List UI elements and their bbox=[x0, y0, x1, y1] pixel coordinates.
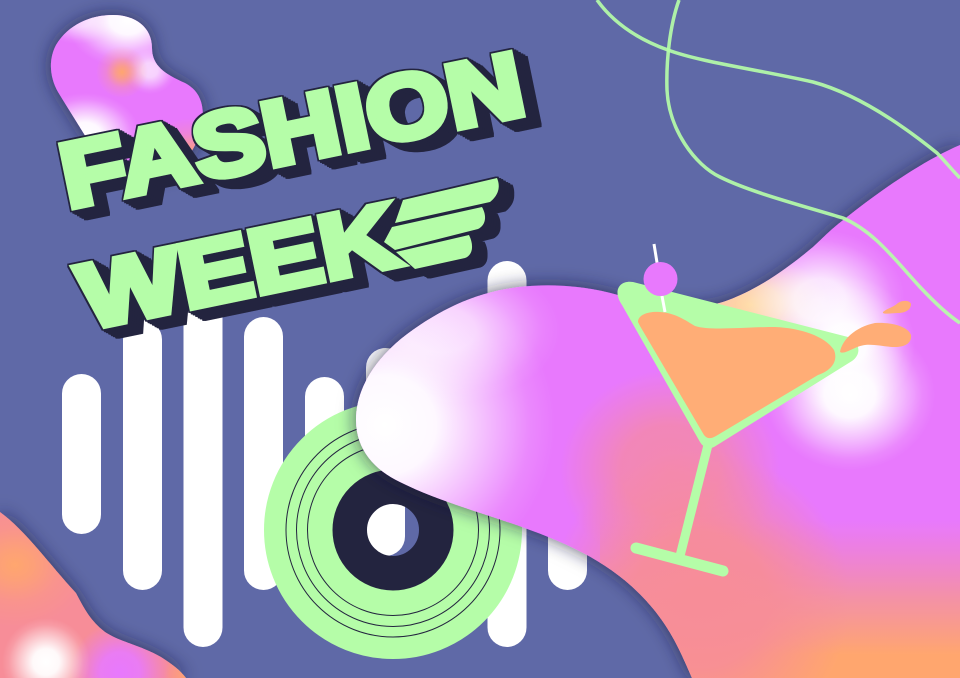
cocktail glass bbox=[618, 244, 911, 571]
splash droplet bbox=[883, 301, 911, 314]
thin curve one bbox=[597, 0, 960, 178]
title: FASHION: FASHION bbox=[52, 34, 532, 228]
blob: top left bbox=[41, 5, 212, 162]
vinyl record bbox=[286, 423, 500, 637]
olive bbox=[644, 262, 678, 296]
wing stripes bbox=[395, 178, 499, 223]
sound wave bars bbox=[62, 261, 587, 647]
stem bbox=[680, 445, 708, 556]
blob: bottom left bbox=[0, 503, 190, 678]
title: WEEK with wings bbox=[71, 178, 499, 349]
cocktail pick bbox=[654, 244, 665, 312]
glass bowl bbox=[618, 282, 858, 448]
pick over bowl bbox=[662, 296, 665, 312]
liquid bbox=[638, 312, 835, 438]
base bbox=[636, 548, 723, 571]
blob: large flowing shape bbox=[342, 140, 960, 678]
title: WEEK with wings: WEEK bbox=[71, 185, 406, 349]
thin curve two bbox=[667, 0, 960, 323]
splash bbox=[840, 323, 911, 353]
